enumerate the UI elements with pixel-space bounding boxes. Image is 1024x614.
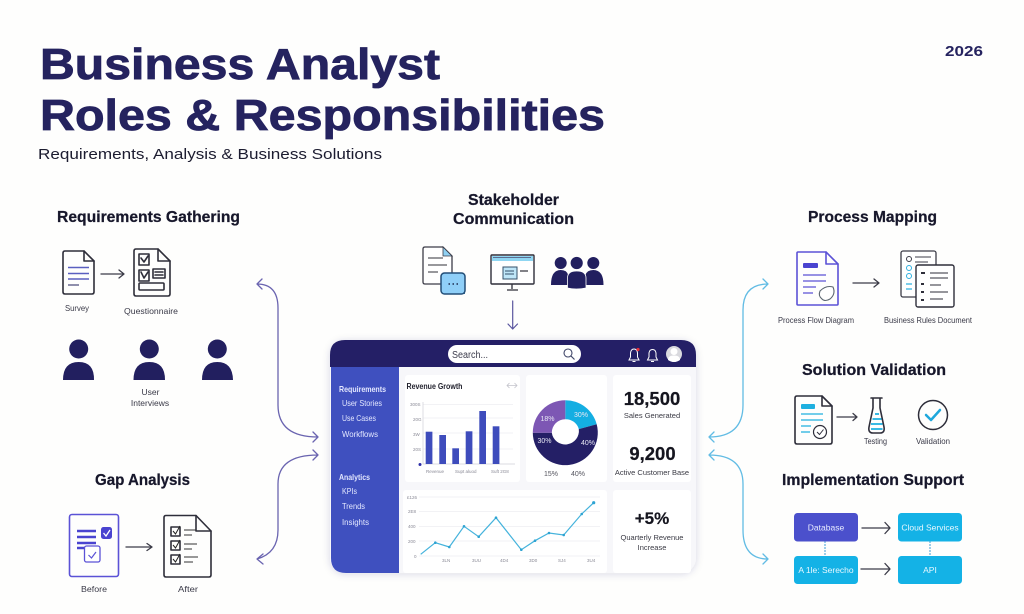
- title: [40, 40, 605, 140]
- arrow: document to testing: [837, 414, 857, 420]
- icon: after checklist: [164, 516, 211, 577]
- icon: avatar: [666, 346, 682, 362]
- title: Business Analyst: [40, 40, 440, 89]
- search box: [448, 345, 581, 363]
- arrow: survey to questionnaire: [101, 270, 124, 278]
- sidebar group: requirements: [339, 384, 386, 439]
- sidebar group: analytics: Analytics: [339, 472, 370, 482]
- card: line chart: 2E8: [408, 509, 417, 514]
- card: donut chart: 15%: [544, 471, 558, 478]
- box: search: A 1le: Serecho: [798, 565, 854, 575]
- card: quarterly increase: Increase: [638, 543, 666, 552]
- card: key metrics: 18,500: [624, 388, 680, 409]
- card: donut chart: 40%: [581, 440, 595, 447]
- sidebar group: requirements: Workflows: [342, 429, 378, 439]
- arrow: database to cloud: [862, 522, 890, 534]
- card: line chart: 4D4: [500, 558, 509, 563]
- label: validation: Validation: [916, 436, 950, 446]
- arrow: implementation to dashboard: [709, 450, 768, 564]
- box: search: [794, 556, 858, 584]
- panel: solution validation: [795, 362, 950, 446]
- card: revenue growth bar chart: 3W: [413, 432, 421, 437]
- card: donut chart: [526, 375, 607, 482]
- card: key metrics: [613, 375, 691, 482]
- label: business rules document: Business Rules Document: [884, 315, 973, 325]
- card: line chart: 400: [408, 524, 416, 529]
- panel: process mapping: [778, 209, 973, 325]
- sidebar group: analytics: Insights: [342, 517, 369, 527]
- box: database: Database: [808, 522, 844, 532]
- label: process flow diagram: Process Flow Diagram: [778, 315, 854, 325]
- label: after: After: [178, 584, 198, 594]
- card: revenue growth bar chart: [405, 375, 520, 482]
- icon: monitor: [491, 255, 534, 290]
- sidebar: [331, 367, 399, 573]
- heading: stakeholder communication: [453, 192, 574, 228]
- icon: survey document: [63, 251, 94, 294]
- bars: [426, 411, 499, 464]
- icon: bell: [648, 350, 658, 362]
- label: questionnaire: Questionnaire: [124, 306, 178, 316]
- card: line chart: 0: [414, 554, 417, 559]
- arrow: gap analysis to dashboard: [257, 450, 318, 564]
- card: quarterly increase: Quarterly Revenue: [621, 533, 683, 542]
- icon: testing flask: [869, 398, 884, 433]
- icon: expand arrows: [507, 383, 517, 388]
- card: key metrics: Active Customer Base: [615, 468, 689, 477]
- card: donut chart: 30%: [574, 412, 588, 419]
- sidebar group: analytics: Trends: [342, 501, 365, 511]
- label: survey: Survey: [65, 303, 90, 313]
- sidebar group: requirements: User Stories: [342, 398, 382, 408]
- icon: notification bell with dot: [629, 348, 640, 362]
- label: user interviews: User: [142, 387, 160, 397]
- dashboard header bar: [330, 340, 696, 367]
- box: api: API: [923, 565, 937, 575]
- panel: requirements gathering: [57, 209, 240, 408]
- card: donut chart: 40%: [571, 471, 585, 478]
- box: cloud services: Cloud Services: [901, 522, 959, 532]
- sidebar group: analytics: [339, 472, 370, 527]
- panel: dashboard: [330, 340, 696, 573]
- card: revenue growth bar chart: Revenue: [426, 469, 445, 474]
- panel: stakeholder communication: [423, 192, 604, 329]
- icon: process flow diagram: [797, 252, 838, 305]
- card: revenue growth bar chart: 20S: [413, 447, 421, 452]
- heading: stakeholder communication: Stakeholder: [468, 192, 559, 209]
- label: user interviews: Interviews: [131, 398, 169, 408]
- connectors between boxes: [825, 541, 930, 556]
- card: line chart: 3UU: [472, 558, 481, 563]
- card: line chart: 3LN: [442, 558, 450, 563]
- icon: document with chat: [423, 247, 465, 294]
- box: cloud services: [898, 513, 962, 542]
- arrow: search to api: [861, 564, 890, 574]
- sidebar group: analytics: KPIs: [342, 486, 357, 496]
- icon: business rules document: [901, 251, 954, 307]
- arrow: communication to dashboard: [508, 301, 518, 329]
- panel: gap analysis: [70, 472, 211, 594]
- chart title: Revenue Growth: [406, 382, 463, 391]
- card: line chart: 3D0: [529, 558, 538, 563]
- icon: before checklist: [70, 514, 118, 576]
- icon: stakeholder group: [551, 256, 604, 289]
- heading: solution validation: Solution Validation: [802, 362, 946, 379]
- card: revenue growth bar chart: 20G: [413, 417, 422, 422]
- heading: stakeholder communication: Communication: [453, 211, 574, 228]
- card: quarterly increase: +5%: [635, 509, 669, 528]
- dashboard frame: [330, 340, 696, 573]
- heading: gap analysis: Gap Analysis: [95, 472, 190, 489]
- card: donut chart: 18%: [540, 416, 555, 423]
- heading: requirements gathering: Requirements Gathering: [57, 209, 240, 226]
- arrow: requirements to dashboard: [257, 279, 318, 442]
- card: key metrics: 9,200: [629, 443, 676, 464]
- title: Roles & Responsibilities: [40, 91, 605, 140]
- heading: process mapping: Process Mapping: [808, 209, 937, 226]
- card: line chart: [403, 490, 607, 573]
- arrow: before to after: [126, 544, 152, 550]
- arrow: process mapping to dashboard: [709, 279, 768, 442]
- icon: validated document: [795, 396, 832, 444]
- box: database: [794, 513, 858, 542]
- card: line chart: 3U4: [587, 558, 596, 563]
- card: line chart: 200: [408, 539, 416, 544]
- card: revenue growth bar chart: Suft 2G8: [491, 469, 509, 474]
- sidebar group: requirements: Use Cases: [342, 413, 376, 423]
- card: line chart: SJ4: [558, 558, 566, 563]
- year: 2026: [945, 44, 983, 60]
- card: key metrics: Sales Generated: [624, 411, 680, 420]
- card: revenue growth bar chart: 300S: [410, 402, 421, 407]
- box: api: [898, 556, 962, 584]
- label: before: Before: [81, 584, 107, 594]
- card: donut chart: 30%: [538, 438, 552, 445]
- card: line chart: £126: [407, 495, 418, 500]
- search box: Search...: [452, 350, 488, 361]
- heading: implementation support: Implementation Support: [782, 472, 965, 489]
- icon: validation check: [918, 400, 948, 430]
- card: revenue growth bar chart: Supt aluod: [455, 469, 477, 474]
- arrow: flow to rules: [853, 279, 879, 287]
- label: testing: Testing: [864, 436, 887, 446]
- sidebar group: requirements: Requirements: [339, 384, 386, 394]
- label: user interviews: [131, 387, 169, 408]
- icon: questionnaire: [134, 249, 170, 296]
- panel: implementation support: [782, 472, 965, 584]
- card: quarterly increase: [613, 490, 691, 573]
- subtitle: Requirements, Analysis & Business Solutions: [38, 146, 382, 163]
- icon: three users: [63, 340, 233, 380]
